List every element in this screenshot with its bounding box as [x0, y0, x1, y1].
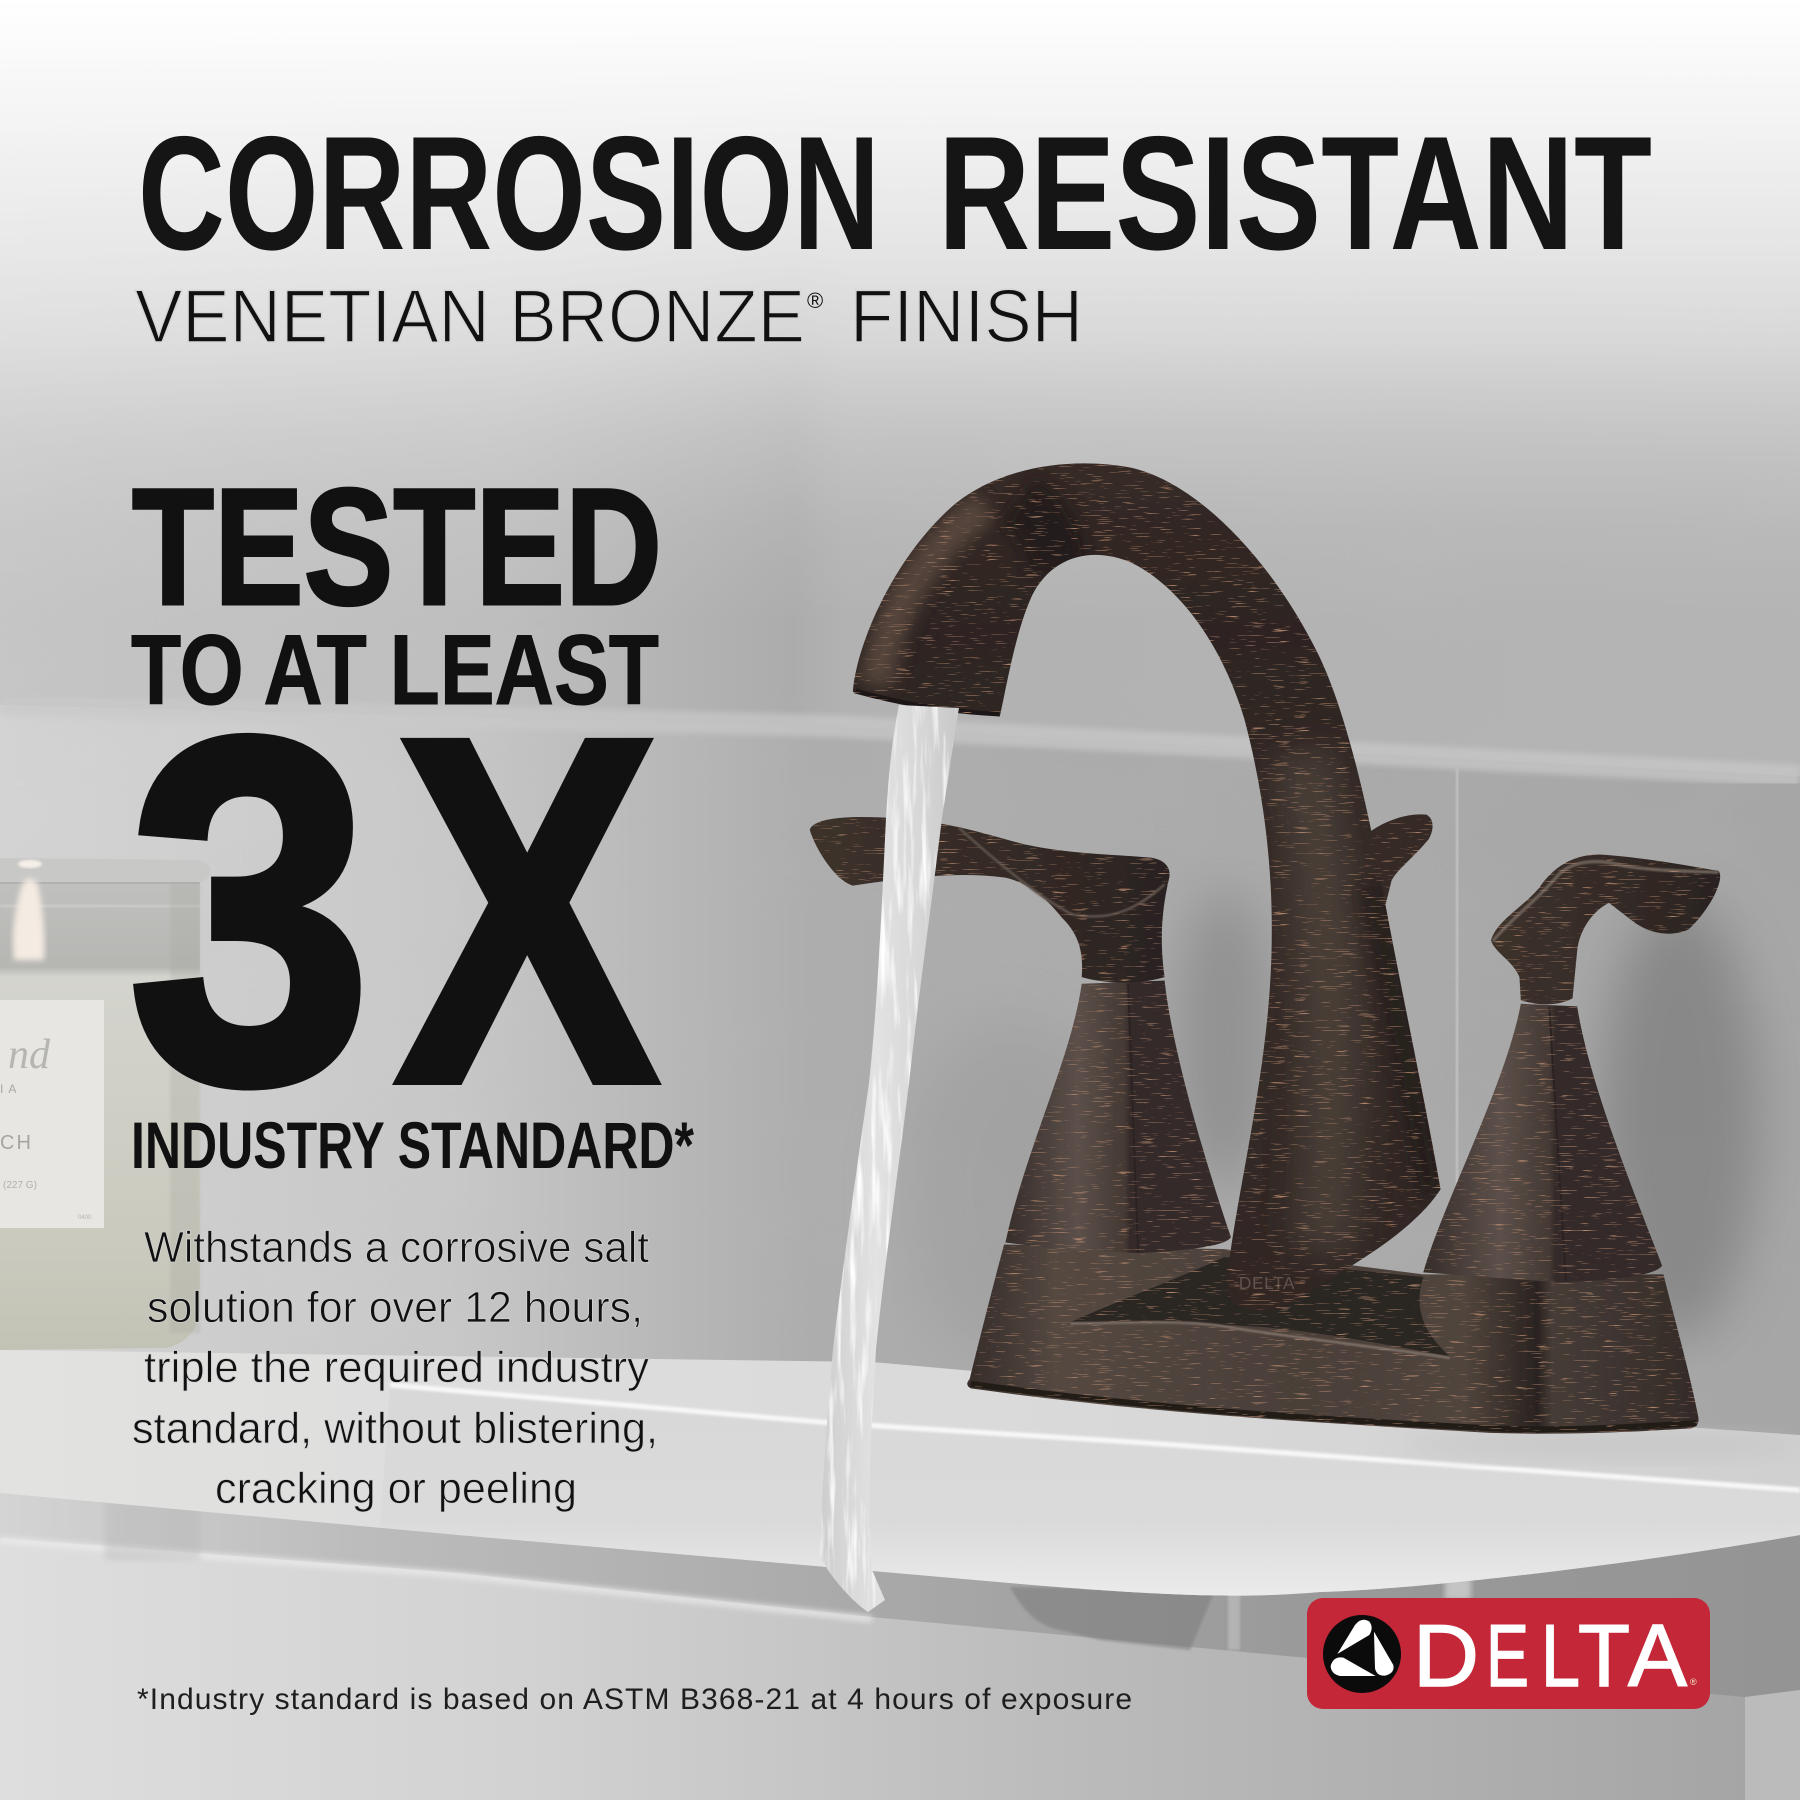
- body text: triple the required industry: [144, 1343, 649, 1392]
- sink front: [0, 1538, 1745, 1800]
- faucet: spout and body: [853, 463, 1441, 1310]
- body text: [132, 1223, 658, 1513]
- wordmark: T: [1578, 1606, 1630, 1705]
- footnote: *Industry standard is based on ASTM B368-21 at 4 hours of exposure: [137, 1683, 1132, 1716]
- body text: solution for over 12 hours,: [147, 1283, 643, 1332]
- faucet: right handle: [1491, 854, 1720, 1004]
- faucet: [810, 463, 1720, 1434]
- wordmark: [1413, 1606, 1687, 1705]
- candle label: IA: [0, 1082, 21, 1096]
- candle label: [0, 1000, 104, 1228]
- vanity counter: [0, 1350, 1800, 1800]
- wordmark: D: [1413, 1606, 1479, 1705]
- wordmark: A: [1628, 1606, 1687, 1705]
- heading: to at least: TO AT LEAST: [131, 614, 659, 725]
- heading: industry standard: INDUSTRY STANDARD*: [131, 1108, 694, 1182]
- faucet: left handle: [810, 817, 1170, 983]
- heading: tested: TESTED: [132, 455, 662, 640]
- wordmark: E: [1486, 1606, 1529, 1705]
- body text: standard, without blistering,: [132, 1404, 658, 1453]
- counter face: [380, 1385, 1800, 1596]
- candle label: CH: [0, 1132, 33, 1154]
- big number: 3X: 3: [128, 636, 372, 1184]
- title: CORROSION: [138, 103, 880, 284]
- Delta logo: ®: [1690, 1677, 1697, 1687]
- running water: [820, 705, 959, 1612]
- candle jar: [0, 858, 210, 1350]
- faucet: embossed DELTA mark: DELTA: [1239, 1273, 1295, 1293]
- wordmark: L: [1541, 1606, 1580, 1705]
- subtitle: VENETIAN BRONZE: [135, 274, 805, 358]
- icon: delta triangle mark: [1323, 1615, 1401, 1693]
- candle label: 0400: [78, 1215, 92, 1221]
- faucet: right bonnet: [1423, 1004, 1662, 1282]
- candle label: nd: [8, 1032, 51, 1078]
- counter surface: [0, 1350, 1800, 1596]
- subtitle: FINISH: [850, 274, 1083, 358]
- big number: 3X: [128, 636, 660, 1184]
- faucet: left bonnet: [1005, 980, 1231, 1253]
- title: [138, 103, 1652, 284]
- faucet: deck base: [967, 1244, 1699, 1434]
- faucet: recessed deck: [1070, 1257, 1450, 1357]
- Delta logo: [1307, 1598, 1710, 1709]
- faucet: back handle: [1369, 814, 1433, 908]
- big number: 3X: X: [396, 636, 660, 1184]
- candle flame: [13, 878, 44, 960]
- subtitle: ®: [807, 288, 823, 313]
- tested claim: [128, 455, 694, 1184]
- faucet: aerator opening: [854, 689, 1000, 716]
- shadow band below counter: [0, 1440, 1800, 1800]
- candle label: (227 G): [3, 1180, 37, 1191]
- body text: cracking or peeling: [215, 1464, 577, 1513]
- body text: Withstands a corrosive salt: [144, 1223, 649, 1272]
